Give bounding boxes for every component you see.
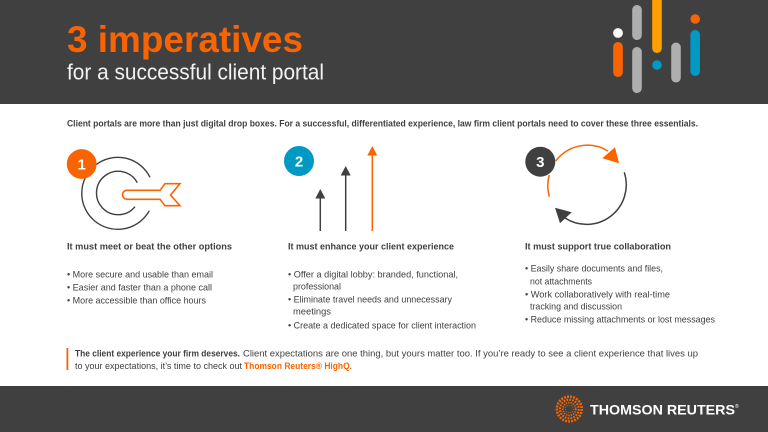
bullet list: imperative 3: tracking and discussion — [530, 300, 622, 312]
bullet list: imperative 2: • Eliminate travel needs and unnecessary — [288, 294, 452, 304]
intro text: Client portals are more than just digital drop boxes. For a successful, differentiated experience, law firm client portals need to cover these three essentials. — [67, 117, 698, 128]
bullet list: imperative 2: professional — [293, 280, 341, 292]
callout: Thomson Reuters® HighQ. — [244, 360, 352, 371]
panel: imperative 2 — [284, 146, 476, 330]
icon: cycle arrows — [548, 145, 626, 224]
bullet list: imperative 2 — [288, 268, 476, 330]
icon: target with dart — [82, 157, 180, 229]
callout: The client experience your firm deserves. — [75, 347, 240, 358]
bullet list: imperative 3: • Work collaboratively with real-time — [525, 288, 670, 300]
panel: header — [0, 0, 768, 104]
callout: to your expectations, it’s time to check out — [75, 360, 242, 371]
bullet list: imperative 1: • Easier and faster than a phone call — [67, 282, 212, 293]
heading: imperative 3: It must support true collaboration — [525, 240, 671, 251]
icon: Thomson Reuters dotted globe — [557, 397, 582, 421]
bullet list: imperative 2: • Offer a digital lobby: branded, functional, — [288, 268, 458, 280]
bullet list: imperative 1 — [67, 269, 213, 305]
subtitle: for a successful client portal — [67, 60, 324, 84]
badge: 3 — [525, 147, 555, 177]
badge: 1: 1 — [78, 156, 86, 174]
icon: data bars logo — [613, 0, 700, 93]
panel: imperative 1 — [67, 149, 232, 305]
badge: 2: 2 — [295, 154, 303, 170]
badge: 2 — [284, 146, 314, 176]
bullet list: imperative 3: • Reduce missing attachments or lost messages — [525, 314, 715, 324]
bullet list: imperative 2: meetings — [293, 306, 331, 316]
bullet list: imperative 1: • More accessible than office hours — [67, 294, 206, 305]
logo wordmark: THOMSON REUTERS — [590, 401, 735, 417]
registered mark: ® — [735, 403, 739, 410]
heading: imperative 1: It must meet or beat the other options — [67, 240, 232, 251]
badge: 3: 3 — [536, 154, 544, 171]
bullet list: imperative 3 — [525, 262, 715, 324]
badge: 1 — [67, 149, 97, 179]
bullet list: imperative 3: • Easily share documents and files, — [525, 262, 663, 274]
panel: imperative 3 — [525, 145, 715, 324]
bullet list: imperative 3: not attachments — [530, 276, 592, 286]
title: 3 imperatives — [67, 19, 303, 60]
icon: three rising arrows — [315, 146, 377, 231]
callout: Client expectations are one thing, but yours matter too. If you’re ready to see a client experience that lives up — [243, 347, 698, 358]
heading: imperative 2: It must enhance your client experience — [288, 240, 454, 251]
bullet list: imperative 1: • More secure and usable than email — [67, 269, 213, 280]
panel: footer — [0, 386, 768, 432]
callout — [66, 347, 698, 371]
bullet list: imperative 2: • Create a dedicated space for client interaction — [288, 320, 476, 330]
